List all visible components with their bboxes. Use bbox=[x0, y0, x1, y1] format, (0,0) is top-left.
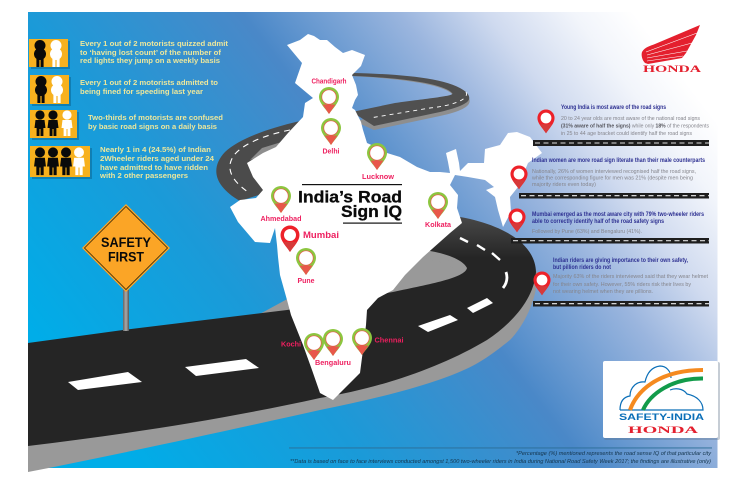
title bbox=[298, 184, 402, 224]
stat text: confused by signs bbox=[88, 113, 223, 131]
pin: Bengaluru bbox=[315, 329, 351, 367]
honda wing logo bbox=[642, 25, 702, 74]
insight pin: pillion riders bbox=[533, 271, 551, 295]
insight pin: young India bbox=[537, 109, 555, 133]
insight: young India: (31% aware of half the signs) while only 18% of the respondents bbox=[561, 124, 709, 130]
insight: young India: 20 to 24 year olds are most aware of the national road signs bbox=[561, 116, 700, 122]
stat text: red lights bbox=[80, 39, 228, 65]
title: Sign IQ bbox=[341, 203, 402, 221]
pin: Chennai: Chennai bbox=[374, 338, 404, 344]
insight: Mumbai: able to correctly identify half of the road safety signs bbox=[532, 219, 665, 225]
pin: Delhi: Delhi bbox=[322, 148, 340, 156]
stat icon: 1 of 2 quizzed bbox=[29, 39, 70, 69]
pin: Pune: Pune bbox=[298, 278, 315, 285]
insight pin: Mumbai bbox=[508, 208, 526, 232]
road divider 2 bbox=[519, 193, 709, 198]
stat icon: 1 in 4 bbox=[30, 146, 92, 179]
insight: women: Indian women are more road sign literate than their male counterparts bbox=[532, 158, 706, 164]
safety india logo card: HONDA bbox=[628, 425, 699, 435]
insight: pillion riders: but pillion riders do not bbox=[553, 265, 611, 271]
insight: pillion riders: Indian riders are giving importance to their own safety, bbox=[553, 258, 688, 264]
insight: Mumbai: Followed by Pune (63%) and Bengaluru (41%). bbox=[532, 229, 642, 235]
stat text: speeding fine: being fined for speeding last year bbox=[80, 87, 203, 96]
insight: pillion riders: for their own safety. However, 55% riders risk their lives by bbox=[553, 282, 691, 288]
insight pin: women bbox=[510, 165, 528, 189]
footnotes: *Percentage (%) mentioned represents the road sense IQ of that particular city bbox=[516, 451, 711, 457]
pin: Kolkata: Kolkata bbox=[425, 222, 451, 229]
safety first sign: SAFETY bbox=[101, 234, 152, 250]
safety india logo card bbox=[603, 361, 720, 440]
insight: young India bbox=[561, 105, 709, 137]
safety first sign bbox=[82, 204, 170, 331]
stat text: confused by signs: Two-thirds of motorists are confused bbox=[88, 113, 223, 122]
stat text: 2 other passengers: 2Wheeler riders aged under 24 bbox=[100, 154, 215, 163]
upper winding road bbox=[216, 73, 470, 201]
title: India’s Road bbox=[298, 188, 402, 206]
honda wing logo: HONDA bbox=[643, 64, 702, 74]
road divider 4 bbox=[533, 301, 709, 306]
road divider 3 bbox=[511, 238, 709, 244]
pin: Chennai bbox=[352, 328, 404, 355]
pin: Delhi bbox=[321, 118, 341, 156]
stat icon: 1 of 2 fined bbox=[30, 75, 71, 106]
insight: pillion riders: not wearing helmet when they are pillions. bbox=[553, 289, 653, 295]
stat text: 2 other passengers: Nearly 1 in 4 (24.5%) of Indian bbox=[100, 145, 211, 154]
insight: women: majority riders even today) bbox=[532, 182, 596, 188]
insight: Mumbai bbox=[532, 212, 705, 235]
insight: Mumbai: Mumbai emerged as the most aware city with 79% two-wheeler riders bbox=[532, 212, 705, 218]
insight: women bbox=[531, 158, 706, 188]
pin: Lucknow: Lucknow bbox=[362, 174, 395, 181]
pin: Kochi bbox=[281, 333, 324, 360]
insight: young India: Young India is most aware of the road signs bbox=[561, 105, 667, 111]
stat text: speeding fine: Every 1 out of 2 motorists admitted to bbox=[80, 78, 218, 87]
insight: women: while the corresponding figure for men was 21% (despite men being bbox=[531, 176, 693, 182]
pin: Lucknow bbox=[362, 143, 395, 181]
stat text: 2 other passengers bbox=[99, 145, 215, 180]
pin: Pune bbox=[296, 248, 316, 285]
pin: Kochi: Kochi bbox=[281, 342, 301, 348]
stat text: speeding fine bbox=[80, 78, 218, 96]
stat icon: two-thirds bbox=[30, 110, 79, 140]
stat text: red lights: Every 1 out of 2 motorists quizzed admit bbox=[80, 39, 228, 48]
pin: Mumbai bbox=[280, 226, 339, 252]
pin: Mumbai: Mumbai bbox=[303, 230, 339, 240]
pin: Chandigarh: Chandigarh bbox=[312, 78, 346, 86]
stat text: red lights: red lights they jump on a weekly basis bbox=[80, 56, 220, 65]
stat text: 2 other passengers: have admitted to have ridden bbox=[100, 163, 208, 172]
pin: Chandigarh bbox=[312, 78, 346, 114]
map of India bbox=[230, 34, 542, 400]
insight: pillion riders bbox=[553, 258, 708, 295]
safety first sign: FIRST bbox=[108, 248, 144, 264]
pin: Bengaluru: Bengaluru bbox=[315, 360, 351, 367]
road divider 1 bbox=[533, 140, 709, 146]
insight: pillion riders: Majority 63% of the riders interviewed said that they wear helmet bbox=[553, 274, 708, 280]
safety india logo card: SAFETY-INDIA bbox=[619, 412, 705, 422]
pin: Ahmedabad: Ahmedabad bbox=[260, 216, 302, 223]
footnotes bbox=[289, 448, 712, 465]
insight: women: Nationally, 26% of women interviewed recognised half the road signs, bbox=[532, 169, 696, 175]
pin: Ahmedabad bbox=[260, 186, 302, 223]
pin: Kolkata bbox=[425, 192, 451, 229]
footnotes: **Data is based on face to face interviews conducted amongst 1,500 two-wheeler riders in India during National Road Safety Week 2017; the findings are illustrative (only) bbox=[290, 459, 711, 465]
stat text: red lights: to ‘having lost count’ of the number of bbox=[80, 48, 221, 57]
main road bbox=[28, 214, 537, 472]
stat text: confused by signs: by basic road signs on a daily basis bbox=[88, 122, 217, 131]
insight: young India: in 25 to 44 age bracket could identify half the road signs bbox=[561, 131, 692, 137]
stat text: 2 other passengers: with 2 other passengers bbox=[99, 171, 188, 180]
